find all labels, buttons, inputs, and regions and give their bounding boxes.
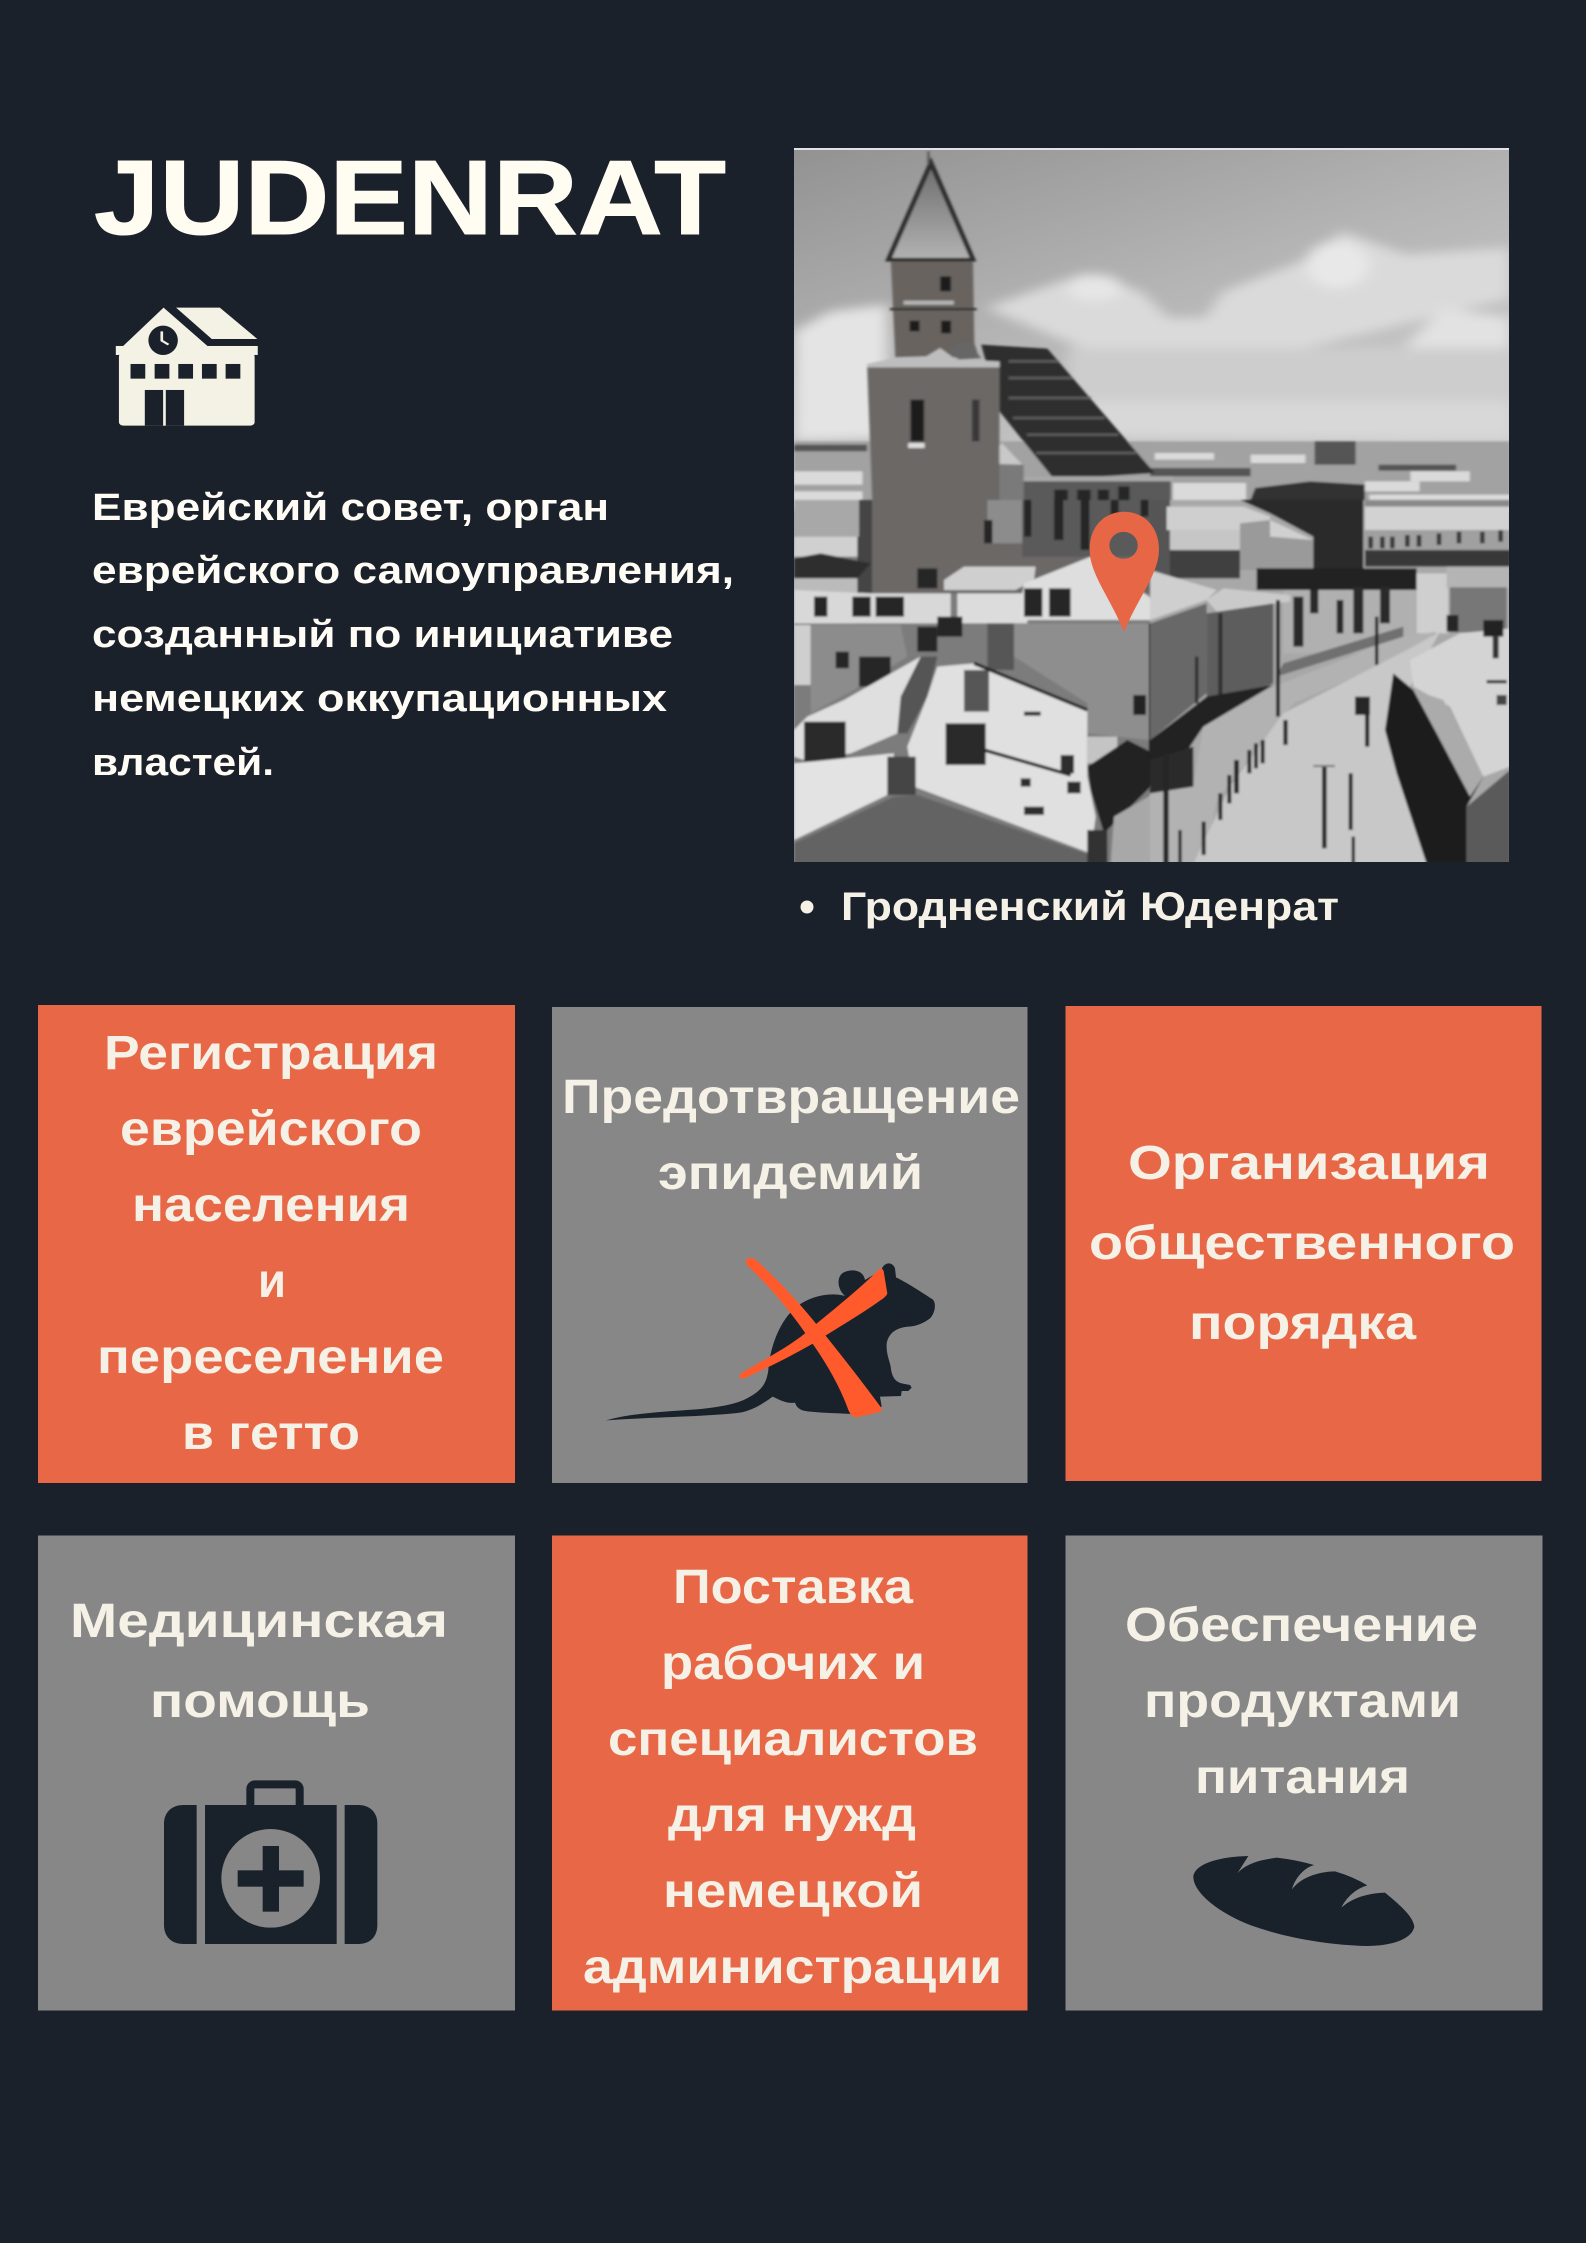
panel heading: supply of workers (583, 1561, 1002, 1994)
intro text block: властей. (92, 742, 274, 784)
panel heading: epidemic prevention: эпидемий (658, 1147, 923, 1200)
panel: food supply (1066, 1536, 1542, 2010)
panel heading: supply of workers: рабочих и (661, 1637, 925, 1690)
panel heading: supply of workers: специалистов (608, 1713, 978, 1766)
panel: medical help (38, 1536, 515, 2010)
panel heading: supply of workers: администрации (583, 1941, 1002, 1994)
panel heading: food supply (1125, 1599, 1478, 1804)
panel heading: supply of workers: для нужд (668, 1789, 916, 1842)
panel heading: registration: в гетто (182, 1407, 360, 1460)
icon: loaf of bread (1193, 1856, 1414, 1946)
panel: supply of workers (552, 1536, 1028, 2010)
intro text block: Еврейский совет, орган (92, 487, 609, 529)
panel: public order (1066, 1006, 1542, 1481)
panel heading: food supply: продуктами (1144, 1675, 1461, 1728)
panel heading: food supply: Обеспечение (1125, 1599, 1478, 1652)
panel heading: supply of workers: немецкой (663, 1865, 923, 1918)
panel heading: registration: и (258, 1255, 286, 1308)
panel heading: registration: еврейского (120, 1103, 422, 1156)
panel heading: public order: общественного (1089, 1217, 1515, 1270)
panel heading: public order: порядка (1189, 1297, 1416, 1350)
panel heading: food supply: питания (1195, 1751, 1410, 1804)
panel heading: epidemic prevention: Предотвращение (562, 1071, 1020, 1124)
panel heading: public order: Организация (1128, 1137, 1490, 1190)
title: JUDENRAT (94, 139, 726, 257)
icon: first aid kit (164, 1784, 377, 1944)
icon: town hall building with clock (116, 308, 258, 426)
panel: registration (38, 1005, 515, 1483)
panel heading: registration: переселение (97, 1331, 444, 1384)
icon: location pin (1090, 512, 1159, 632)
panel heading: public order (1089, 1137, 1515, 1350)
panel heading: medical help: Медицинская (70, 1595, 448, 1648)
panel heading: medical help: помощь (150, 1675, 370, 1728)
panel heading: epidemic prevention (562, 1071, 1020, 1200)
photo: Grodno view with church and snowy roofs (794, 148, 1510, 864)
panel heading: medical help (70, 1595, 448, 1728)
panel heading: registration: населения (132, 1179, 410, 1232)
panel: epidemic prevention (552, 1007, 1028, 1483)
intro text block: созданный по инициативе (92, 614, 673, 656)
icon: crossed-out rat (606, 1258, 935, 1420)
panel heading: registration: Регистрация (104, 1027, 438, 1080)
panel heading: registration (97, 1027, 444, 1460)
intro text block: еврейского самоуправления, (92, 550, 734, 592)
intro text block (92, 487, 734, 784)
caption with bullet: Гродненский Юденрат (841, 885, 1339, 929)
intro text block: немецких оккупационных (92, 678, 667, 720)
panel heading: supply of workers: Поставка (673, 1561, 913, 1614)
